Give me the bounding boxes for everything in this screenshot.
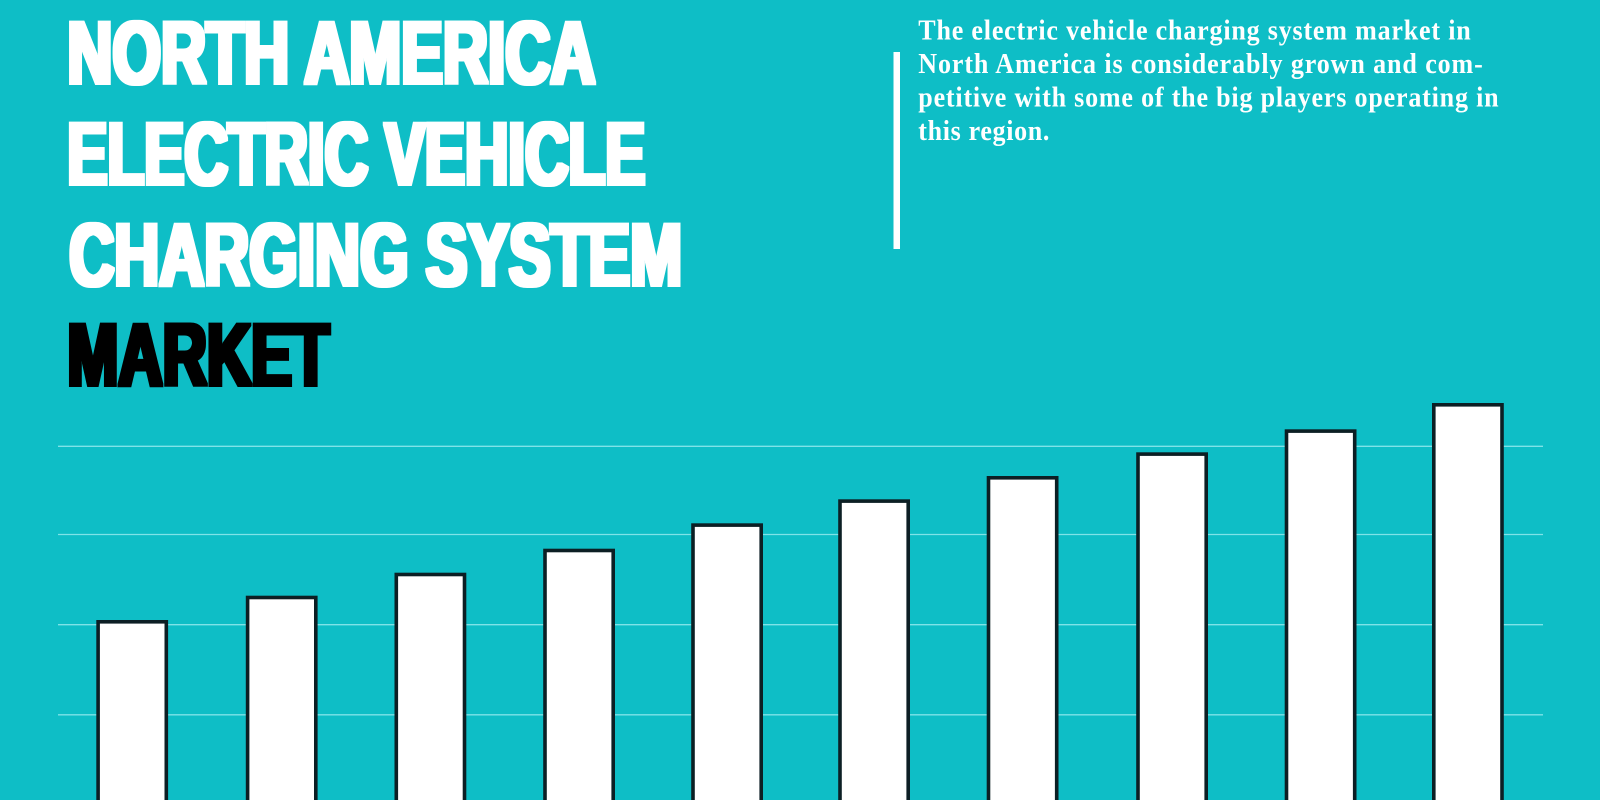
- bar 3: [396, 574, 464, 800]
- description text block: North America is considerably grown and com-: [918, 48, 1483, 79]
- bar chart: [58, 405, 1543, 800]
- description text block: The electric vehicle charging system market in: [918, 15, 1471, 46]
- bar 8: [1138, 454, 1206, 800]
- description text block: [918, 15, 1499, 146]
- title: CHARGING SYSTEM: [69, 204, 682, 304]
- bar 1: [98, 622, 166, 800]
- bar 2: [248, 598, 316, 800]
- bar 9: [1286, 431, 1355, 800]
- title: NORTH AMERICA: [67, 2, 595, 102]
- description text block: petitive with some of the big players operating in: [918, 82, 1499, 113]
- bar 4: [545, 550, 613, 800]
- bar 6: [840, 501, 908, 800]
- bar 7: [988, 478, 1057, 800]
- vertical accent rule: [894, 52, 900, 249]
- title: ELECTRIC VEHICLE: [67, 103, 645, 203]
- description text block: this region.: [918, 115, 1049, 146]
- bar 5: [693, 525, 761, 800]
- title: [67, 2, 682, 404]
- bar 10: [1434, 405, 1502, 800]
- title: MARKET: [67, 304, 329, 404]
